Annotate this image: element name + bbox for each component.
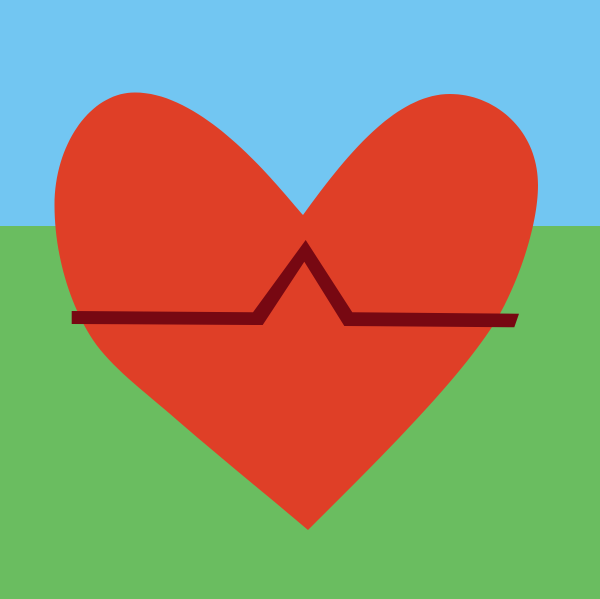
icon: heartbeat line (72, 240, 519, 327)
background: grass (0, 226, 600, 599)
icon: heart (54, 92, 538, 530)
background: sky (0, 0, 600, 226)
